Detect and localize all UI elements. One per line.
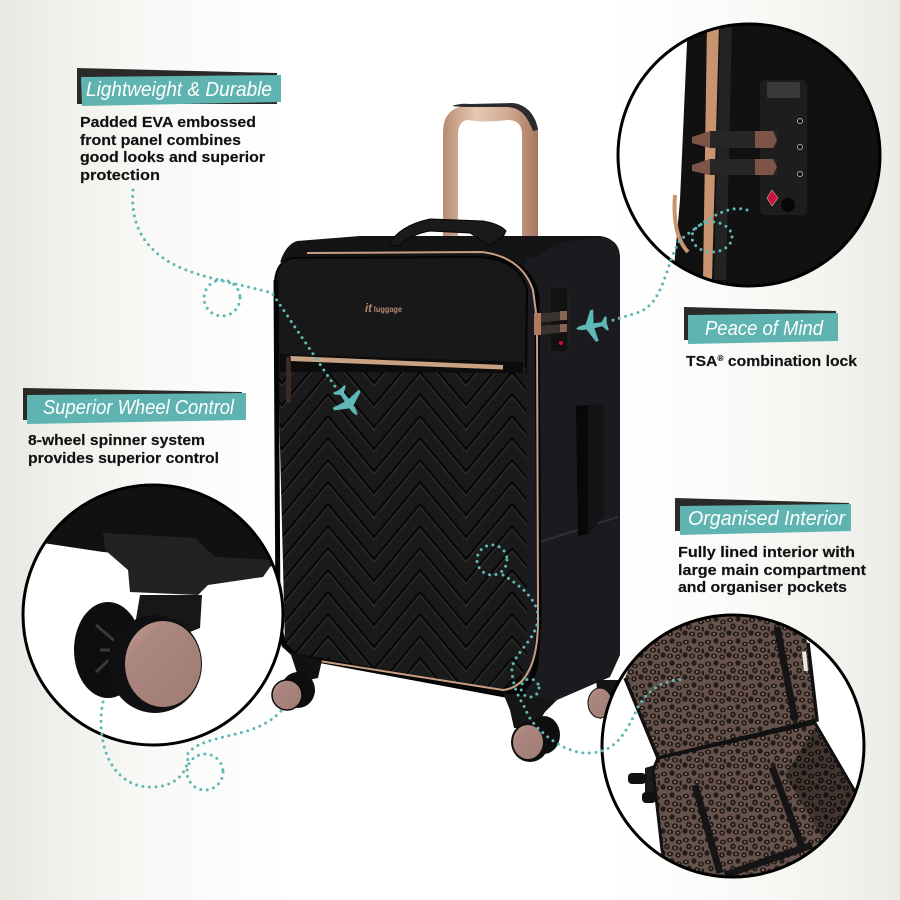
- body text: and organiser pockets: [678, 579, 847, 596]
- heading: superior wheel control: Superior Wheel Control: [43, 397, 235, 419]
- mini wheels: [628, 765, 655, 803]
- lock latch: [767, 82, 800, 98]
- callout: lightweight and durable: [77, 68, 281, 184]
- body text: front panel combines: [80, 132, 241, 149]
- lid: [625, 616, 816, 756]
- curved trim: [675, 195, 688, 252]
- front panel upper: [275, 257, 527, 372]
- detail circle: interior: [602, 600, 864, 885]
- heading: peace of mind: Peace of Mind: [705, 318, 824, 340]
- rear right wheel: [588, 680, 620, 719]
- telescopic handle: [443, 103, 538, 236]
- lower straps: [695, 767, 812, 875]
- base shadow: [284, 640, 540, 702]
- heading: superior wheel control: [23, 388, 246, 424]
- callout: organised interior: [675, 498, 866, 596]
- quilted chevron front panel: [278, 368, 527, 690]
- body text: provides superior control: [28, 450, 219, 467]
- body text: 8-wheel spinner system: [28, 432, 205, 449]
- carry handle: [389, 219, 506, 246]
- TSA badge: [767, 190, 778, 206]
- back wheel: [74, 602, 134, 698]
- lower inner wall shade: [785, 727, 854, 840]
- dials: [798, 118, 802, 176]
- wheels: [272, 652, 620, 762]
- pocket zip: [280, 354, 523, 403]
- callout: superior wheel control: [23, 388, 246, 467]
- front panel edge and zip: [276, 252, 539, 695]
- lid frame: [625, 643, 817, 758]
- detail circle: combination lock: [618, 20, 890, 290]
- body text: [28, 432, 219, 467]
- body text: [80, 114, 265, 184]
- detail circle: wheel: [20, 470, 290, 745]
- body text: good looks and superior: [80, 149, 265, 166]
- wheel housing: [103, 533, 275, 595]
- body text: ®: [717, 354, 724, 363]
- lid strap: [777, 627, 795, 720]
- heading: organised interior: Organised Interior: [688, 508, 846, 530]
- keyhole: [781, 198, 795, 212]
- heading: peace of mind: [684, 307, 838, 344]
- dotted route: lock: [610, 209, 747, 321]
- rear left wheel: [272, 652, 322, 710]
- suitcase: [272, 103, 620, 762]
- callout: peace of mind: [684, 307, 858, 370]
- stem: [136, 595, 202, 632]
- rose disc: [125, 621, 201, 707]
- lower compartment: [653, 723, 860, 885]
- body text: [678, 544, 866, 596]
- side lock: [534, 287, 568, 352]
- dotted route: interior: [477, 545, 685, 753]
- zip pull top: [692, 131, 777, 148]
- body top: [277, 236, 620, 300]
- plane icon: lock: [573, 307, 611, 345]
- dotted route: lightweight: [133, 190, 336, 388]
- front wheel tyre: [108, 615, 202, 713]
- body text: large main compartment: [678, 562, 866, 579]
- front wheel: [503, 693, 560, 762]
- zip band: [714, 24, 732, 280]
- plane icon: front panel: [326, 380, 370, 424]
- zipper: [703, 24, 719, 280]
- side panel seam: [540, 517, 618, 542]
- body text: Padded EVA embossed: [80, 114, 256, 131]
- heading: lightweight and durable: Lightweight & Durable: [86, 79, 272, 101]
- dotted route: wheel: [101, 702, 282, 790]
- heading: lightweight and durable: [77, 68, 281, 106]
- body text: TSA: [686, 353, 716, 370]
- heading: organised interior: [675, 498, 851, 535]
- brand tag: [802, 651, 808, 671]
- body text: Fully lined interior with: [678, 544, 855, 561]
- side panel: [522, 238, 620, 700]
- zip pull bottom: [692, 159, 777, 175]
- case side: [674, 26, 878, 284]
- body text: combination lock: [724, 353, 858, 370]
- body text: protection: [80, 167, 160, 184]
- side strap handle: [576, 404, 604, 536]
- lock body: [760, 80, 807, 215]
- logo: it luggage: [365, 301, 403, 315]
- case underside: [46, 486, 272, 566]
